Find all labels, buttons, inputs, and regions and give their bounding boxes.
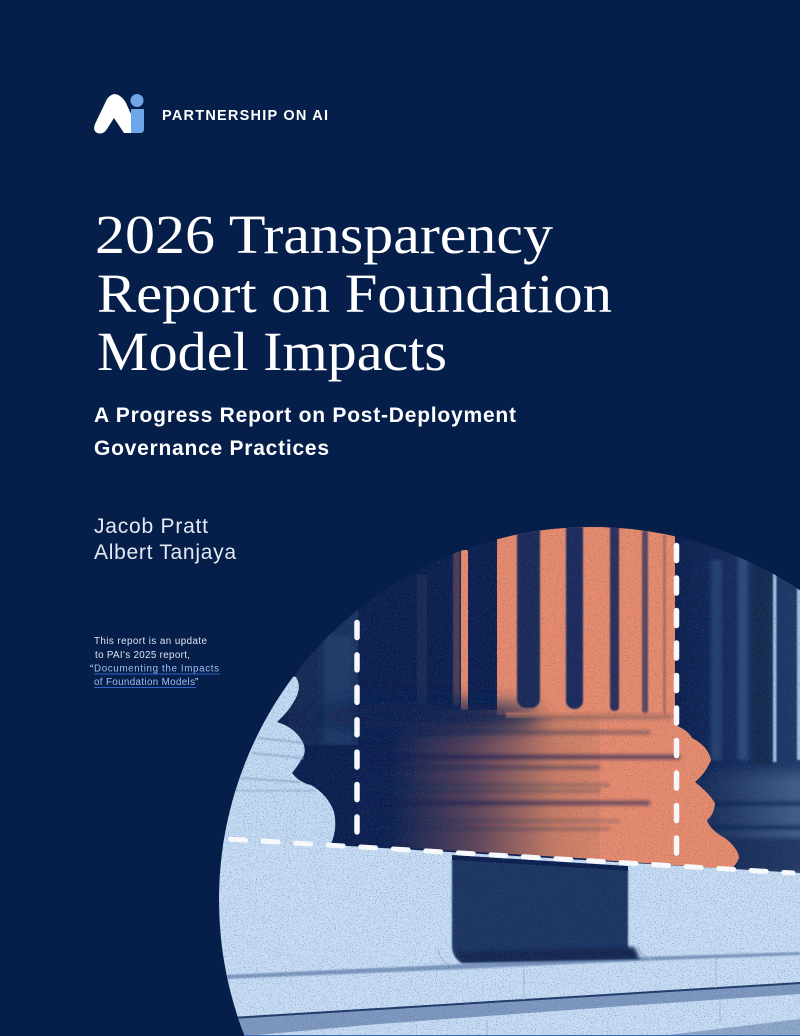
- logo wordmark: PARTNERSHIP ON AI: [162, 108, 328, 124]
- title: [95, 204, 612, 382]
- logo: Partnership on AI: [94, 94, 328, 134]
- dashed baseline: [230, 839, 793, 873]
- plinth recess: [452, 859, 640, 963]
- left pale column base: [222, 676, 336, 846]
- note: update to 2025 report: Documenting the Impacts: [94, 664, 219, 674]
- icon: Ai mark: [94, 94, 144, 134]
- lower step band: [232, 983, 800, 1036]
- left background column: [288, 600, 358, 745]
- title: Report on Foundation: [97, 263, 612, 324]
- title: 2026 Transparency: [95, 204, 554, 265]
- soft ledge shadow: [225, 952, 800, 979]
- note: update to 2025 report: [90, 636, 220, 688]
- authors: Albert Tanjaya: [94, 541, 236, 564]
- subtitle: Governance Practices: [94, 437, 329, 460]
- title: Model Impacts: [97, 321, 447, 382]
- film grain: [215, 520, 800, 1036]
- subtitle: [94, 404, 516, 460]
- dashed outline right vertical: [674, 546, 679, 855]
- note: update to 2025 report: of Foundation Models: [94, 677, 195, 688]
- subtitle: A Progress Report on Post-Deployment: [94, 404, 516, 427]
- column flutes: [506, 520, 676, 718]
- bottom edge line: [215, 1035, 800, 1036]
- note: update to 2025 report: This report is an update: [94, 636, 208, 647]
- right background column: [696, 546, 800, 873]
- base top fade: [310, 702, 540, 730]
- note: update to 2025 report: “: [90, 664, 93, 674]
- note: update to 2025 report: ”: [195, 677, 198, 688]
- base shading streaks: [370, 717, 680, 830]
- illustration: classical column in circular crop: [210, 520, 800, 1036]
- note: update to 2025 report: to PAI's 2025 report,: [95, 650, 190, 661]
- authors: [94, 515, 236, 564]
- stone plinth: [215, 838, 800, 1036]
- orange column shaft and base: [310, 520, 739, 869]
- dashed outline left vertical: [354, 622, 360, 834]
- authors: Jacob Pratt: [94, 515, 208, 538]
